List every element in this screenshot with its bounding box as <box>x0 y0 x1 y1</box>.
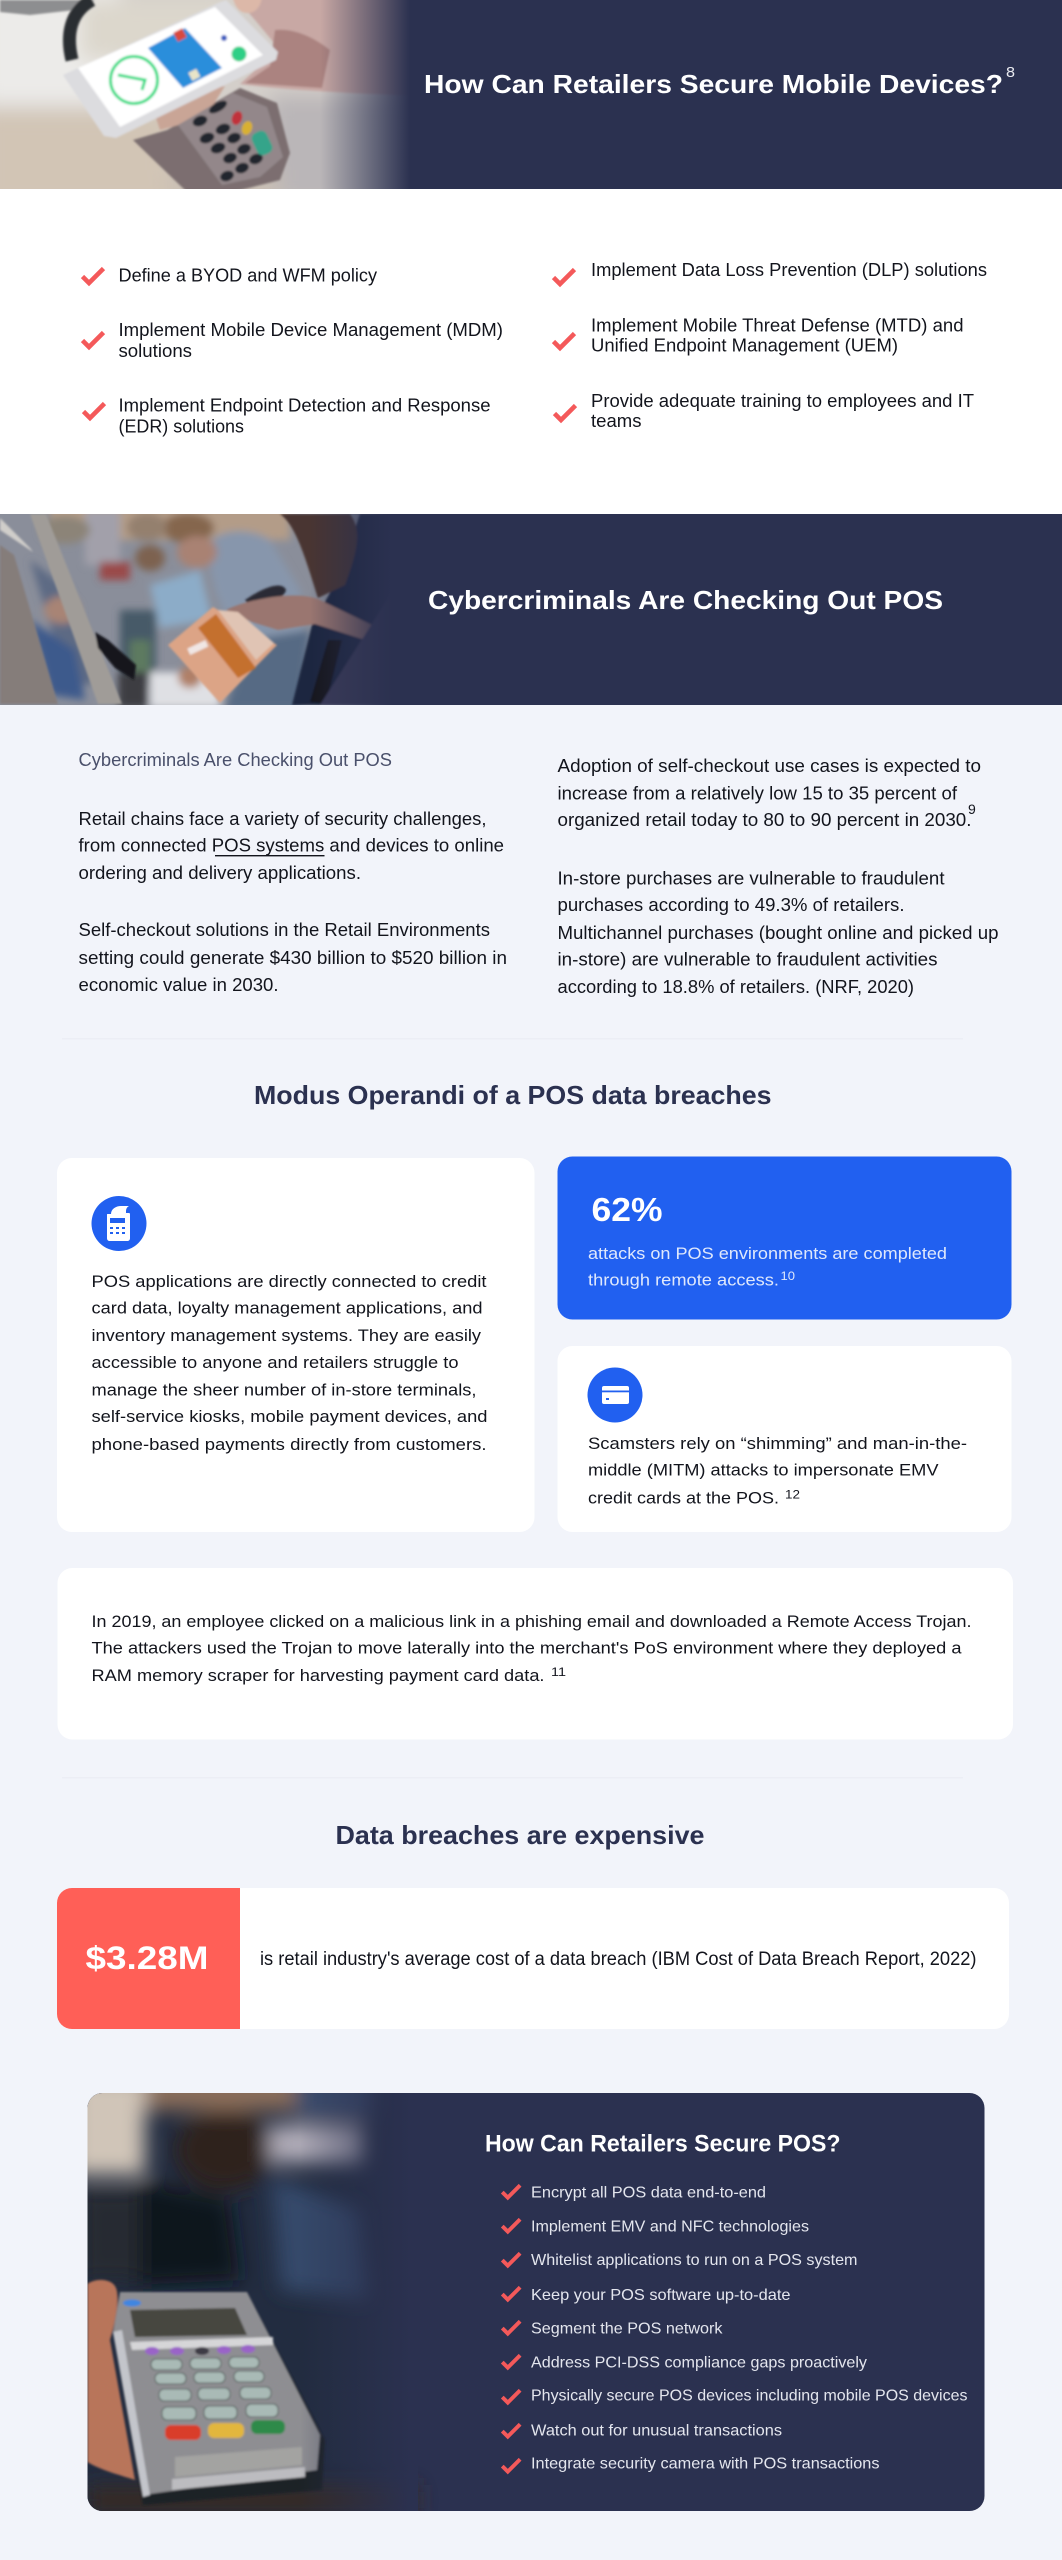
item: EDR: (EDR) solutions <box>118 416 244 436</box>
card: cost of a data breach <box>57 1888 1009 2029</box>
card text <box>92 1272 488 1454</box>
subheading: Cybercriminals Are Checking Out POS <box>78 750 392 770</box>
item: EMV and NFC: Implement EMV and NFC technologies <box>531 2218 809 2236</box>
paragraph: fraud statistics: in-store) are vulnerable to fraudulent activities <box>558 950 938 970</box>
panel: mobile checklist background <box>0 189 1062 514</box>
paragraph: security challenges: ordering and delivery applications. <box>78 863 361 883</box>
icon: credit card <box>588 1368 642 1422</box>
card text <box>588 1434 967 1508</box>
paragraph: fraud statistics <box>558 868 998 997</box>
stat description: through remote access. <box>588 1270 779 1290</box>
checklist: mobile device security <box>82 260 987 436</box>
text block: intro left column <box>78 750 507 995</box>
card text: accessible to anyone and retailers struggle to <box>92 1353 458 1372</box>
card text: POS applications are directly connected to credit <box>92 1272 487 1291</box>
paragraph: self-checkout value: economic value in 2030. <box>78 975 278 995</box>
item: security camera: Integrate security camera with POS transactions <box>531 2456 880 2472</box>
paragraph: adoption <box>558 756 981 830</box>
paragraph: security challenges: from connected POS systems and devices to online <box>78 836 504 856</box>
paragraph: self-checkout value <box>78 920 507 995</box>
stat number: 62% <box>592 1191 662 1228</box>
stat value: $3.28M <box>86 1940 208 1976</box>
card text: 12 <box>785 1488 800 1502</box>
item: MTD <box>554 316 964 356</box>
photo: self checkout scanning <box>0 514 378 705</box>
card text: In 2019, an employee clicked on a malicious link in a phishing email and downloaded a Remote Access Trojan. <box>92 1612 972 1631</box>
item: MDM <box>82 320 503 361</box>
item: DLP: Implement Data Loss Prevention (DLP) solutions <box>591 260 987 280</box>
item: MDM: solutions <box>118 341 192 361</box>
stat description: attacks on POS environments are completed <box>588 1244 947 1263</box>
item: MTD: Unified Endpoint Management (UEM) <box>591 336 898 356</box>
card text: credit cards at the POS. <box>588 1488 779 1508</box>
item: training: teams <box>591 411 642 431</box>
card text: Scamsters rely on “shimming” and man-in-the- <box>588 1434 967 1453</box>
card: 62% statistic <box>558 1156 1012 1320</box>
item: physical security: Physically secure POS devices including mobile POS devices <box>531 2388 968 2404</box>
card text: self-service kiosks, mobile payment devices, and <box>92 1407 488 1426</box>
item: whitelist: Whitelist applications to run on a POS system <box>531 2252 858 2269</box>
footnote 8: 8 <box>1006 64 1015 81</box>
icon: POS terminal <box>92 1196 146 1251</box>
stat description: 10 <box>780 1269 795 1283</box>
item: BYOD: Define a BYOD and WFM policy <box>118 266 377 286</box>
panel: how to secure POS <box>70 2075 984 2515</box>
stat description: is retail industry's average cost of a data breach (IBM Cost of Data Breach Report, 2022) <box>260 1949 976 1970</box>
paragraph: adoption: increase from a relatively low 15 to 35 percent of <box>558 784 958 804</box>
card text <box>92 1612 972 1685</box>
card text: RAM memory scraper for harvesting payment card data. <box>92 1666 544 1685</box>
card text: card data, loyalty management applications, and <box>92 1298 482 1318</box>
item: training: Provide adequate training to employees and IT <box>591 391 974 411</box>
paragraph: adoption: organized retail today to 80 to 90 percent in 2030. <box>558 810 972 830</box>
card text: phone-based payments directly from customers. <box>92 1435 486 1454</box>
paragraph: fraud statistics: according to 18.8% of retailers. (NRF, 2020) <box>558 977 914 997</box>
checklist: POS security <box>502 2184 968 2472</box>
heading: data breaches: Data breaches are expensive <box>336 1820 704 1850</box>
card text: inventory management systems. They are easily <box>92 1326 482 1345</box>
paragraph: security challenges <box>78 809 504 883</box>
paragraph: fraud statistics: purchases according to 49.3% of retailers. <box>558 895 904 915</box>
item: MDM: Implement Mobile Device Management (MDM) <box>118 320 503 340</box>
item: training <box>554 391 974 431</box>
item: software update: Keep your POS software up-to-date <box>531 2287 791 2304</box>
title: How Can Retailers Secure Mobile Devices? <box>424 69 1003 99</box>
card: shimming <box>558 1346 1012 1532</box>
text block: intro right column <box>558 756 998 997</box>
title: Cybercriminals Are Checking Out POS <box>428 585 943 615</box>
card text: 11 <box>551 1665 566 1679</box>
card: POS applications <box>57 1158 534 1532</box>
stat description <box>588 1244 947 1290</box>
card text: middle (MITM) attacks to impersonate EMV <box>588 1460 939 1480</box>
item: MTD: Implement Mobile Threat Defense (MTD) and <box>591 316 964 336</box>
card text: manage the sheer number of in-store terminals, <box>92 1380 477 1400</box>
card: 2019 incident <box>58 1568 1013 1740</box>
header banner: secure mobile devices <box>0 0 1062 210</box>
panel title: How Can Retailers Secure POS? <box>485 2130 840 2158</box>
item: encrypt: Encrypt all POS data end-to-end <box>531 2184 766 2202</box>
paragraph: self-checkout value: setting could generate $430 billion to $520 billion in <box>78 948 507 968</box>
paragraph: security challenges: Retail chains face a variety of security challenges, <box>78 809 486 829</box>
item: segment: Segment the POS network <box>531 2320 724 2338</box>
paragraph: adoption: 9 <box>968 801 976 817</box>
paragraph: self-checkout value: Self-checkout solutions in the Retail Environments <box>78 920 490 940</box>
photo: phone paying at card terminal <box>0 0 405 189</box>
item: EDR <box>84 396 490 436</box>
item: unusual transactions: Watch out for unusual transactions <box>531 2422 782 2440</box>
red stat block <box>57 1888 240 2029</box>
paragraph: fraud statistics: In-store purchases are vulnerable to fraudulent <box>558 868 944 888</box>
photo: man holding card terminal <box>70 2075 418 2515</box>
item: EDR: Implement Endpoint Detection and Response <box>118 396 490 416</box>
paragraph: fraud statistics: Multichannel purchases (bought online and picked up <box>558 923 998 943</box>
card text: The attackers used the Trojan to move laterally into the merchant's PoS environment where they deployed a <box>92 1638 962 1658</box>
heading: modus operandi: Modus Operandi of a POS data breaches <box>254 1080 772 1110</box>
paragraph: adoption: Adoption of self-checkout use cases is expected to <box>558 756 981 776</box>
header banner: POS <box>0 505 1062 710</box>
item: PCI-DSS: Address PCI-DSS compliance gaps proactively <box>531 2354 867 2372</box>
